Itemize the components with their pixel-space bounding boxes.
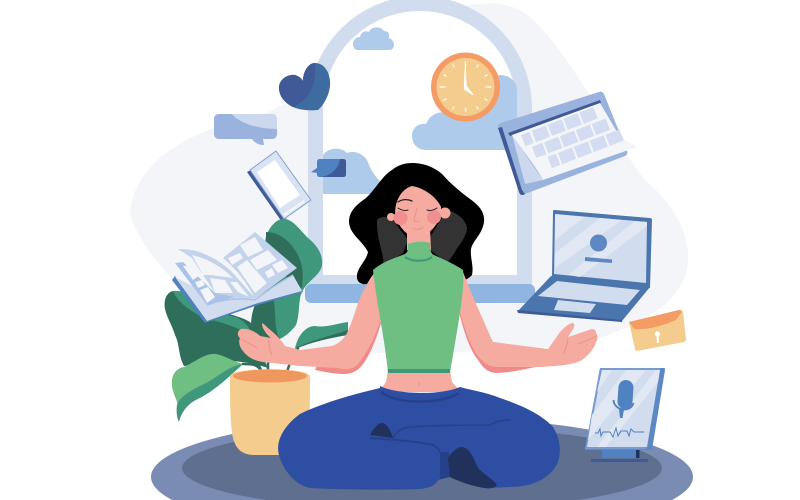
icon: heart — [279, 63, 330, 110]
stand — [602, 449, 636, 458]
icon: clock — [431, 52, 500, 122]
foot: left — [370, 423, 393, 438]
background blob — [130, 4, 688, 353]
icon: small chat bubble — [311, 159, 346, 177]
icon: calendar — [498, 92, 637, 195]
book cover edge — [172, 276, 303, 323]
sleeveless green top — [373, 242, 463, 373]
cloud: centre left — [323, 149, 390, 194]
right arm — [455, 292, 550, 373]
icon: phone — [247, 151, 311, 222]
hair back — [349, 163, 484, 284]
rug — [151, 417, 693, 500]
facial features — [398, 200, 437, 210]
leaf: upper centre — [251, 219, 322, 339]
calendar grid — [521, 101, 624, 174]
book page block — [175, 275, 302, 321]
book — [172, 232, 303, 323]
icon: laptop — [517, 210, 652, 322]
neck — [407, 228, 431, 250]
right hand crease — [563, 336, 597, 354]
woman — [238, 163, 597, 490]
plant — [165, 219, 348, 422]
window frame — [305, 0, 535, 303]
foot: right — [448, 447, 497, 488]
left ear — [387, 213, 395, 221]
upper left sheet — [178, 249, 255, 298]
plant pot — [230, 369, 310, 455]
icon: voice tablet — [585, 368, 665, 462]
hair inner shadow — [377, 210, 467, 265]
leaf: light green — [172, 354, 243, 405]
stems — [208, 324, 298, 372]
leaf: left dark — [165, 291, 268, 368]
window sill — [305, 284, 535, 303]
lower left sheet — [175, 262, 255, 305]
waistband — [381, 392, 459, 402]
icon: speech bubble — [214, 114, 277, 145]
cloud: top small — [353, 27, 394, 50]
left arm — [315, 320, 382, 374]
icon: envelope — [629, 310, 686, 351]
right page — [223, 232, 297, 299]
microphone — [617, 380, 634, 410]
right ear — [440, 208, 450, 218]
belly — [379, 370, 461, 392]
leaf: right small — [295, 322, 348, 349]
page edge wave — [207, 275, 293, 305]
face — [395, 186, 441, 237]
cheeks — [394, 211, 408, 225]
pants — [278, 386, 560, 490]
clock hands — [464, 59, 474, 95]
left hand crease — [241, 339, 272, 355]
cloud: large behind clock — [412, 75, 517, 150]
